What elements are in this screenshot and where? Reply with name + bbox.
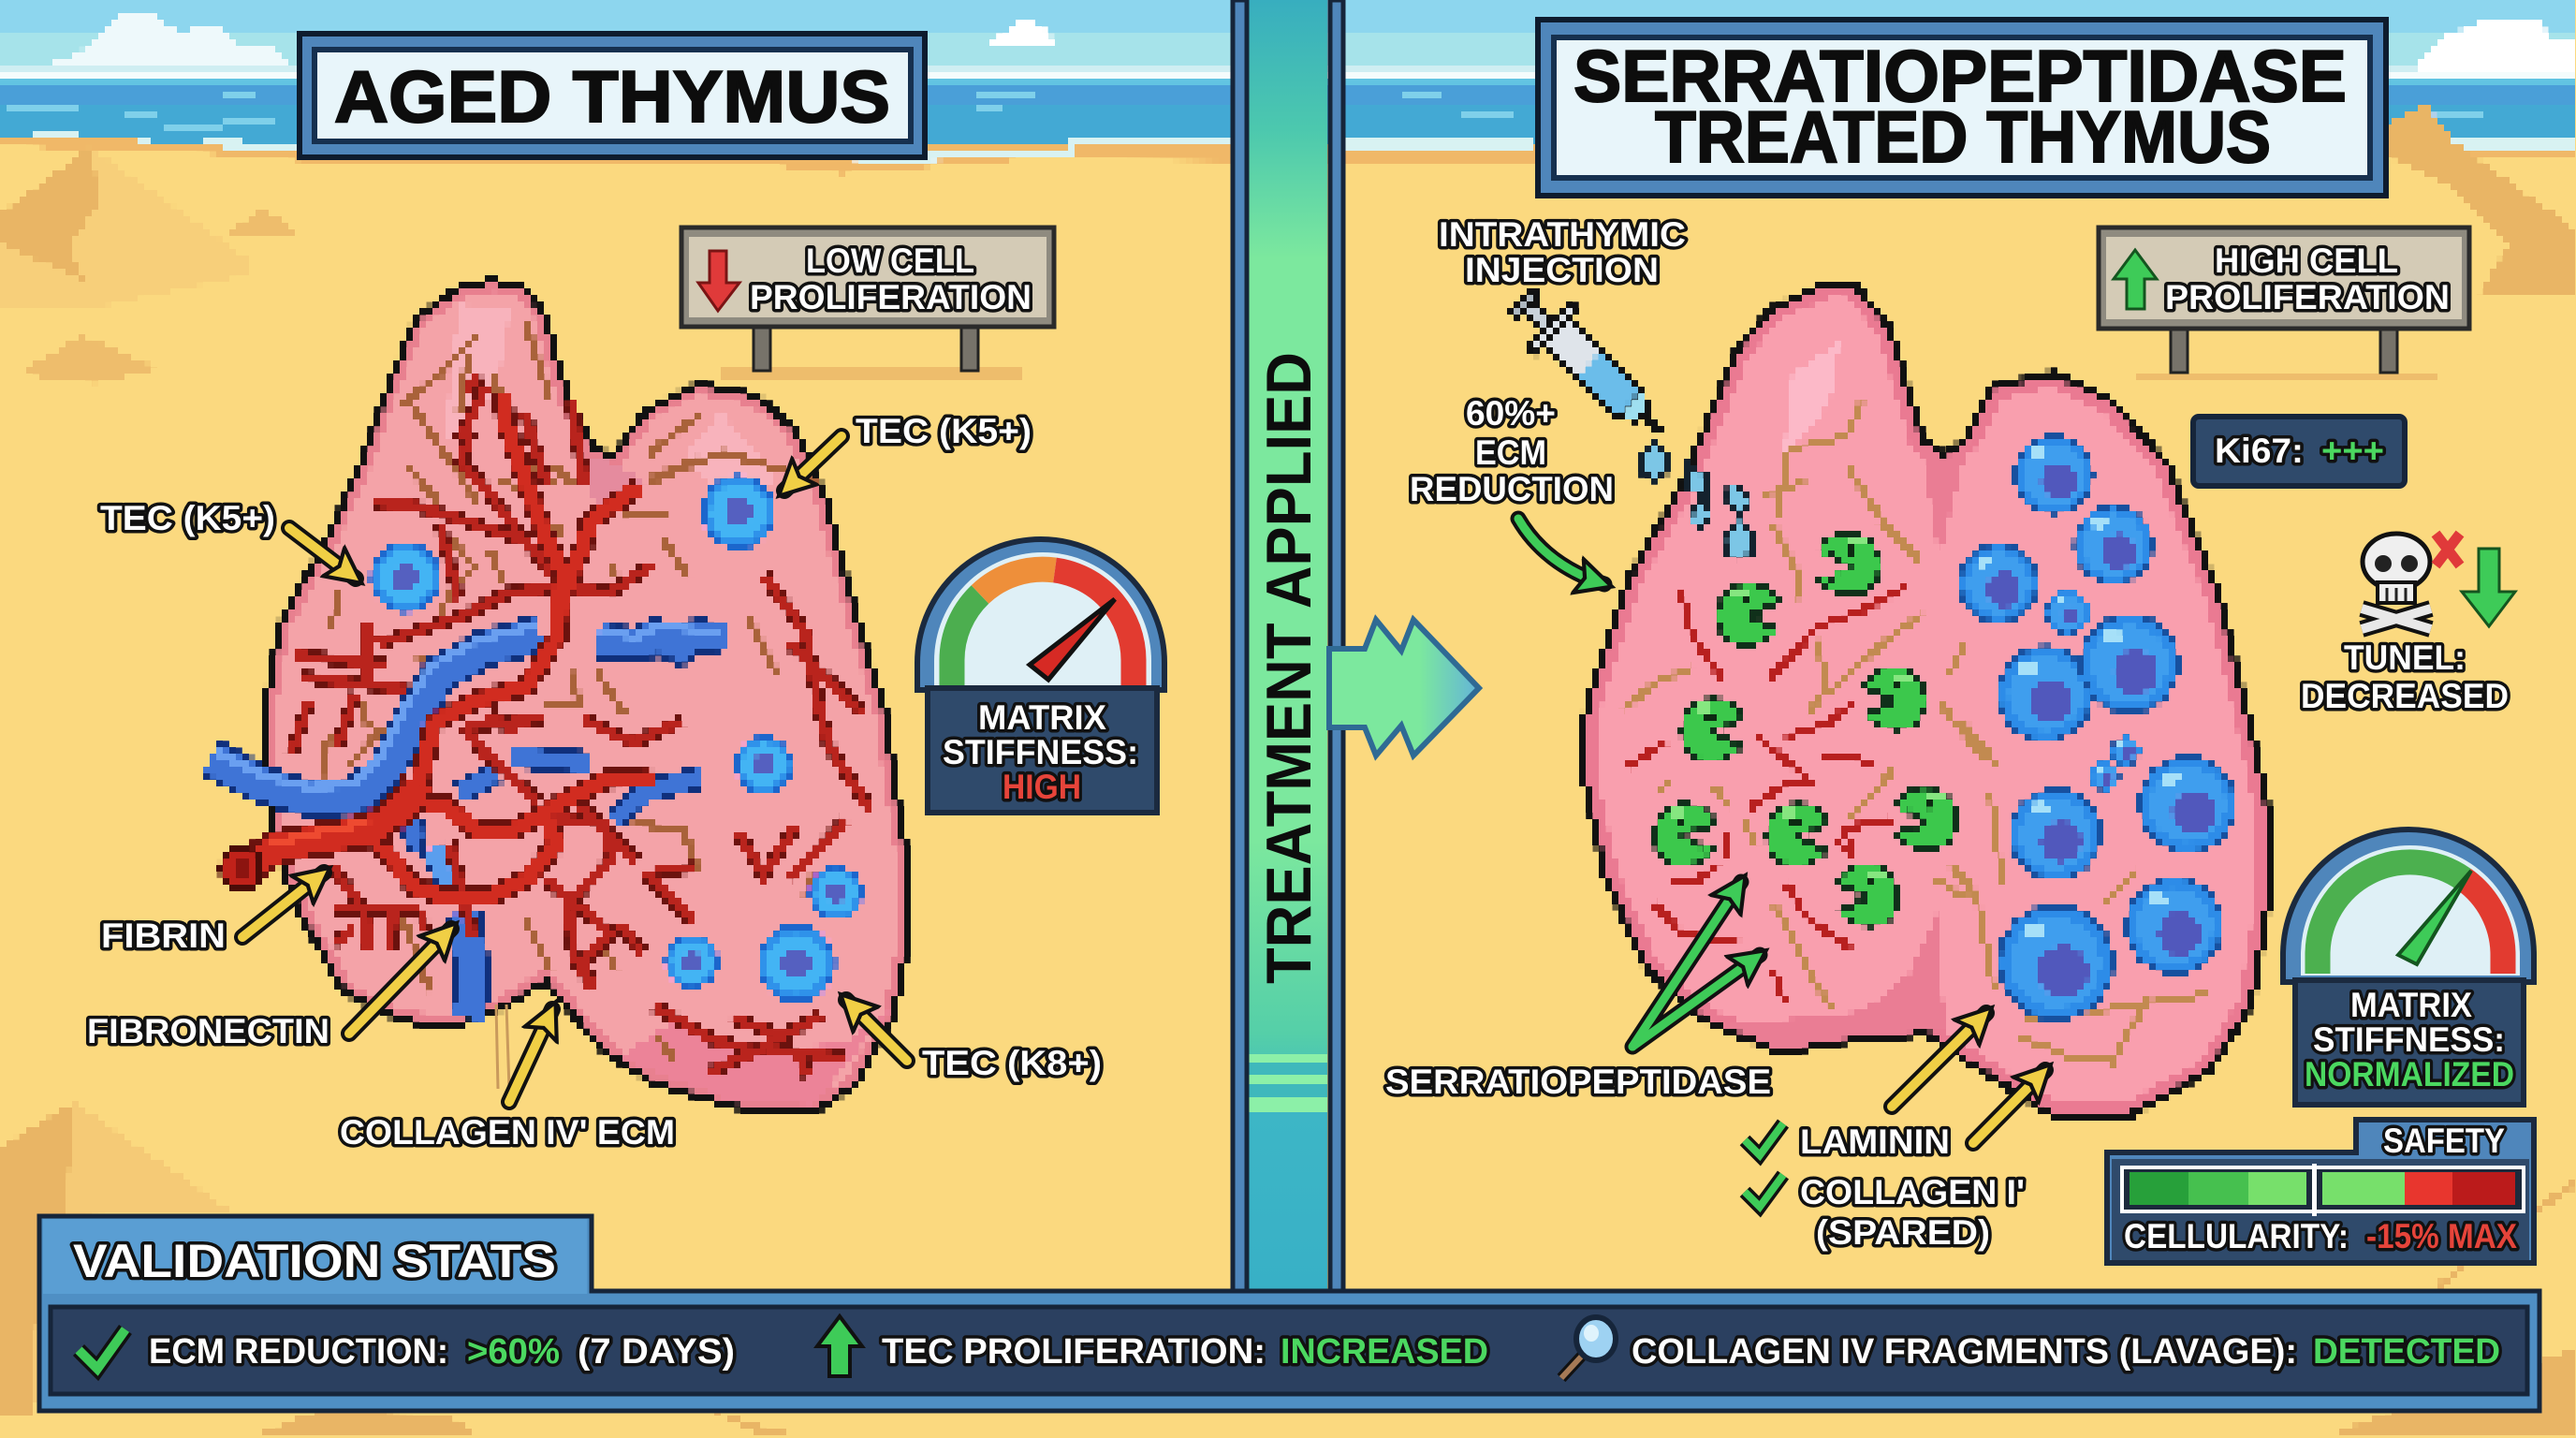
enzyme: green serratiopeptidase molecules xyxy=(1654,534,1956,926)
panel: safety cellularity xyxy=(2107,1120,2534,1263)
stat: TEC proliferation: TEC PROLIFERATION: xyxy=(882,1332,1266,1372)
arrow: ECM reduction curved xyxy=(1518,519,1604,584)
stray fibres under lobe xyxy=(496,1005,509,1089)
label: TEC K8: TEC (K8+) xyxy=(922,1044,1102,1082)
gauge: matrix stiffness normalized: MATRIX xyxy=(2350,986,2472,1024)
needle xyxy=(2398,871,2471,964)
title: serratiopeptidase treated thymus xyxy=(1538,20,2386,196)
panel: safety cellularity: SAFETY xyxy=(2383,1122,2505,1160)
panel: safety cellularity: CELLULARITY: xyxy=(2124,1217,2349,1255)
TEC cells xyxy=(370,475,863,1003)
arrow: treatment direction xyxy=(1329,620,1479,756)
stat: collagen IV fragments xyxy=(1561,1317,2500,1378)
gauge: matrix stiffness high: HIGH xyxy=(1003,768,1081,806)
panel: aged thymus organ illustration xyxy=(212,284,903,1109)
panel: treatment divider band xyxy=(1233,0,1343,1292)
label: collagen IV ECM: COLLAGEN IV' ECM xyxy=(340,1113,675,1152)
panel: safety cellularity: -15% MAX xyxy=(2366,1217,2517,1255)
label: intrathymic injection xyxy=(1439,215,1686,289)
badge: Ki67 xyxy=(2193,417,2405,486)
stat: ECM reduction: >60% xyxy=(467,1332,560,1372)
icon: green up arrow xyxy=(2114,250,2157,309)
badge: Ki67: Ki67: xyxy=(2215,432,2304,470)
degraded fibrin fragments xyxy=(1627,587,1907,1004)
icon: skull with cross and down arrow xyxy=(2362,534,2515,629)
label: 60 percent ECM reduction: REDUCTION xyxy=(1410,470,1614,508)
panel: validation stats xyxy=(39,1216,2539,1411)
sign: high cell proliferation: HIGH CELL xyxy=(2215,242,2398,280)
stat: collagen IV fragments: COLLAGEN IV FRAGMENTS (LAVAGE): xyxy=(1632,1332,2297,1372)
list: spared matrix components xyxy=(1745,1123,2025,1252)
label arrows left xyxy=(242,436,907,1102)
icon: syringe xyxy=(1500,276,1682,455)
label: fibronectin: FIBRONECTIN xyxy=(87,1012,329,1050)
badge: Ki67: +++ xyxy=(2321,432,2384,470)
remaining ECM fragments xyxy=(1622,399,2207,1068)
organ: aged thymus lobes xyxy=(267,284,903,1109)
arrows: laminin and collagen pointers xyxy=(1892,1013,2045,1143)
label: intrathymic injection: INTRATHYMIC xyxy=(1439,215,1686,254)
label: TEC K5 left: TEC (K5+) xyxy=(100,499,275,537)
label: TUNEL decreased xyxy=(2301,638,2509,715)
title: aged thymus: AGED THYMUS xyxy=(334,55,890,138)
title: aged thymus xyxy=(300,34,925,157)
organ: treated thymus lobes xyxy=(1588,286,2265,1114)
title: serratiopeptidase treated thymus: SERRATIOPEPTIDASE xyxy=(1573,35,2347,117)
label: fibrin: FIBRIN xyxy=(101,917,226,955)
sign: high cell proliferation: PROLIFERATION xyxy=(2165,278,2450,316)
proliferating TEC cells xyxy=(1958,434,2237,1021)
stat: TEC proliferation: INCREASED xyxy=(1281,1332,1488,1372)
label: serratiopeptidase: SERRATIOPEPTIDASE xyxy=(1385,1063,1771,1101)
stat: ECM reduction xyxy=(79,1329,735,1372)
fibronectin blue vessels xyxy=(212,625,725,1019)
stat: ECM reduction: (7 DAYS) xyxy=(578,1332,735,1372)
ECM brown collagen strands xyxy=(325,321,821,1058)
heading: treatment applied: TREATMENT APPLIED xyxy=(1253,352,1325,984)
label: TEC K5 right: TEC (K5+) xyxy=(856,412,1032,450)
icon: red down arrow xyxy=(698,251,739,311)
label: TUNEL decreased: TUNEL: xyxy=(2344,638,2466,677)
title: serratiopeptidase treated thymus: TREATED THYMUS xyxy=(1655,95,2271,178)
list: spared matrix components: LAMININ xyxy=(1800,1123,1950,1161)
fibrin red branching network xyxy=(222,374,871,1077)
gauge: matrix stiffness high xyxy=(917,539,1164,813)
gauge: matrix stiffness normalized: NORMALIZED xyxy=(2305,1055,2514,1093)
sign: low cell proliferation: LOW CELL xyxy=(806,242,974,280)
panel: treated thymus organ illustration xyxy=(1588,286,2265,1114)
drops xyxy=(1640,440,1754,558)
sign: low cell proliferation: PROLIFERATION xyxy=(750,278,1032,316)
label: TUNEL decreased: DECREASED xyxy=(2301,677,2509,715)
sign: low cell proliferation xyxy=(681,227,1054,371)
list: spared matrix components: COLLAGEN I' xyxy=(1800,1173,2025,1211)
dunes xyxy=(0,147,246,309)
stat: collagen IV fragments: DETECTED xyxy=(2313,1332,2500,1372)
heading: validation stats: VALIDATION STATS xyxy=(73,1235,556,1287)
gauge: matrix stiffness high: MATRIX xyxy=(978,698,1106,737)
label: 60 percent ECM reduction: ECM xyxy=(1475,433,1546,472)
label: 60 percent ECM reduction xyxy=(1410,394,1614,508)
gauge: matrix stiffness normalized xyxy=(2283,829,2534,1105)
sign: high cell proliferation xyxy=(2099,227,2469,373)
gauge: matrix stiffness high: STIFFNESS: xyxy=(943,733,1138,771)
stat: ECM reduction: ECM REDUCTION: xyxy=(149,1332,448,1372)
label: intrathymic injection: INJECTION xyxy=(1465,251,1659,289)
needle xyxy=(1030,599,1115,680)
arrows: serratiopeptidase pointers xyxy=(1632,882,1760,1047)
stat: TEC proliferation xyxy=(817,1316,1488,1376)
safety bar xyxy=(2122,1164,2524,1216)
clouds xyxy=(49,11,292,67)
label: 60 percent ECM reduction: 60%+ xyxy=(1466,394,1556,433)
list: spared matrix components: (SPARED) xyxy=(1816,1213,1990,1252)
gauge: matrix stiffness normalized: STIFFNESS: xyxy=(2313,1020,2505,1059)
